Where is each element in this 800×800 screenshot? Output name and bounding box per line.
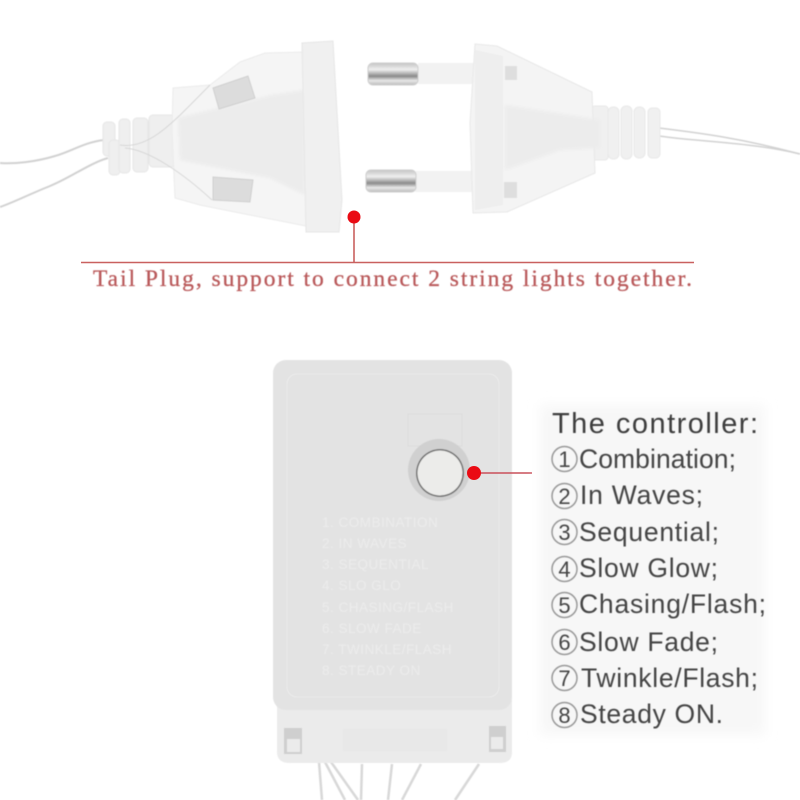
tail plug wires [0,140,108,207]
controller lid inner edge [287,374,499,697]
button red dot [467,466,481,480]
right plug rivets [504,66,517,198]
tail plug strain relief ribs [103,115,175,175]
right plug strain relief ribs [592,106,660,160]
right plug upper pin [368,63,476,85]
left tail plug [0,41,342,232]
controller base left slot [284,728,302,754]
embossed mode list: 3. SEQUENTIAL [322,557,429,572]
tail plug front flange [302,41,342,232]
controller wires [319,762,479,800]
panel background [540,405,765,735]
right plug inner core [505,105,600,170]
embossed mode list: 8. STEADY ON [322,663,421,678]
controller button [408,439,470,501]
mode 8: 8 [558,703,571,728]
embossed mode list: 5. CHASING/FLASH [322,600,454,615]
right plug lower pin [366,170,473,192]
button leader line [474,472,532,474]
right plug body [470,44,595,213]
tail plug inner wires [120,85,212,200]
right plug front flange highlight [475,50,503,210]
controller modes panel [540,405,766,735]
controller base [277,700,512,763]
mode list [552,444,766,729]
embossed mode list: 2. IN WAVES [322,536,407,551]
callout text: Tail Plug, support to connect 2 string lights together. [93,266,692,292]
tail plug inner core [178,90,305,195]
tail plug body [172,52,306,226]
mode 2: 2 [558,484,571,509]
embossed mode list: 7. TWINKLE/FLASH [322,642,452,657]
mode 3: Sequential; [579,517,719,547]
mode 4: Slow Glow; [579,553,718,583]
controller box [273,360,512,800]
right plug wire [659,128,800,154]
mode 4: 4 [558,557,571,582]
embossed mode list [322,515,454,678]
embossed mode list: 1. COMBINATION [322,515,438,530]
controller base right slot [489,726,506,752]
embossed mode list: 6. SLOW FADE [322,621,422,636]
mode 6: 6 [558,630,571,655]
callout leader line [81,217,694,262]
controller base centre recess [343,729,447,751]
mode 2: In Waves; [580,480,703,510]
callout: tail plug [81,210,694,292]
controller lid [273,360,512,710]
mode 8: Steady ON. [580,699,723,729]
mode 7: Twinkle/Flash; [581,663,758,693]
mode 1: Combination; [579,444,736,474]
mode 1: 1 [558,447,571,472]
tail plug metal contact top [213,76,255,109]
embossed model box [408,414,462,446]
mode 3: 3 [558,520,571,545]
mode 5: Chasing/Flash; [579,589,766,619]
right mains plug [366,44,800,213]
embossed mode list: 4. SLO GLO [322,578,401,593]
mode 5: 5 [558,593,571,618]
mode 7: 7 [558,666,571,691]
callout: controller button [467,466,532,480]
mode 6: Slow Fade; [579,627,718,657]
callout red dot [348,210,360,224]
tail plug metal contact bottom [213,177,253,202]
panel heading: The controller: [552,408,758,440]
